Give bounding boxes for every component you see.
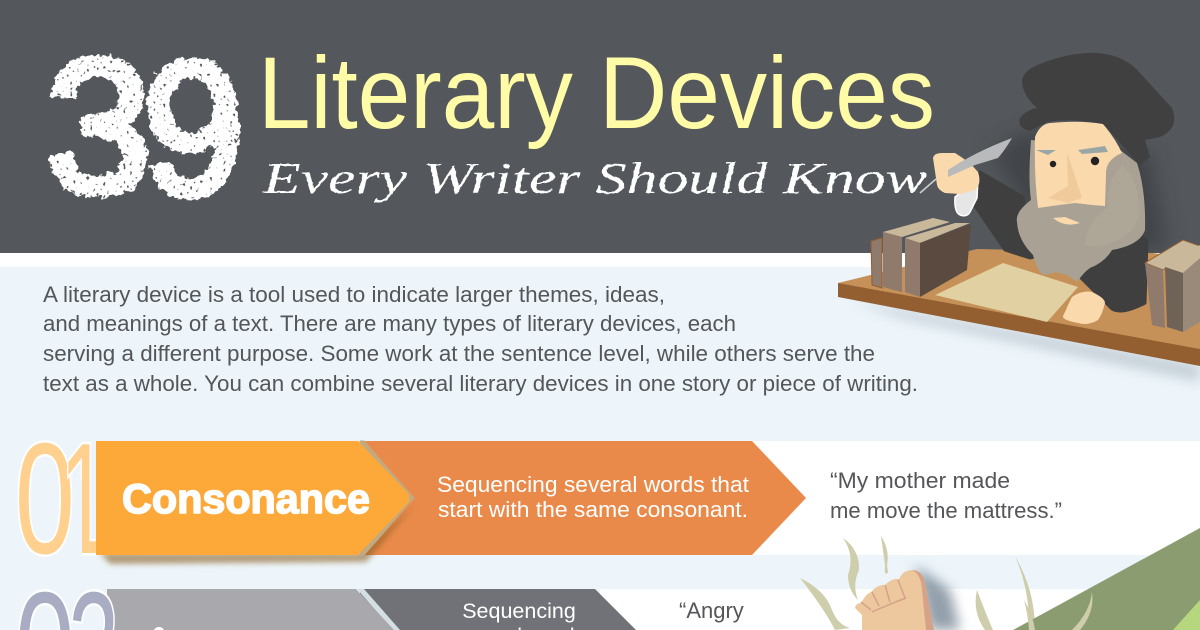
face xyxy=(1035,122,1122,208)
desk front edge xyxy=(838,283,1200,366)
heading number: 39: 9 xyxy=(143,23,243,235)
row 2 title tip xyxy=(154,627,164,630)
toe lines xyxy=(861,580,906,612)
illustration: writer at desk xyxy=(838,53,1200,382)
lighter beard tone xyxy=(1085,166,1139,246)
definition text: Sequencing several words that xyxy=(437,472,750,497)
wisp over hill xyxy=(1072,592,1092,630)
intro paragraph xyxy=(43,282,918,396)
row 1: example quote: “My mother made xyxy=(830,468,1010,493)
lower hand xyxy=(1063,292,1105,324)
row 2: definition arrow xyxy=(360,589,636,630)
row 1: example quote: me move the mattress.” xyxy=(830,498,1062,523)
arrow bevel xyxy=(357,589,400,630)
raised hand xyxy=(933,153,979,194)
brows xyxy=(1036,146,1108,155)
row 1 white band xyxy=(700,441,1200,555)
definition text xyxy=(437,472,750,522)
light green hill xyxy=(1173,600,1200,630)
robe and arm xyxy=(973,172,1147,311)
definition text xyxy=(453,599,585,630)
eyes xyxy=(1050,161,1056,167)
heading number: 39 xyxy=(46,21,243,235)
white strip under header xyxy=(0,253,1200,267)
arrow bevel xyxy=(360,441,414,555)
books left xyxy=(871,218,971,297)
nose shadow xyxy=(1048,153,1082,203)
definition text: start with the same consonant. xyxy=(438,497,748,522)
title: Literary Devices xyxy=(258,36,935,150)
arrow shadow xyxy=(100,505,414,564)
intro paragraph: and meanings of a text. There are many types of literary devices, each xyxy=(43,311,736,336)
row 2: example quote: “Angry xyxy=(679,598,744,623)
intro paragraph: text as a whole. You can combine several literary devices in one story or piece of writing. xyxy=(43,371,918,396)
row 1: number 01: 1 xyxy=(60,412,108,588)
desk top xyxy=(838,249,1200,350)
quill tip xyxy=(920,179,936,193)
definition text: Sequencing xyxy=(462,599,576,623)
foot side shade xyxy=(912,570,934,630)
foot xyxy=(855,570,926,630)
row 1 title: Consonance xyxy=(122,475,370,522)
heading number: 39: 3 xyxy=(46,21,152,233)
row 1: title arrow xyxy=(96,441,414,564)
subtitle: Every Writer Should Know xyxy=(262,154,928,203)
foot shadow xyxy=(915,565,960,630)
row 1: definition arrow xyxy=(360,441,806,555)
row 2 white band xyxy=(600,589,1200,630)
illustration: foot with smell xyxy=(800,528,1200,630)
row 1: example quote xyxy=(830,468,1062,523)
row 1: number 01 xyxy=(18,440,100,557)
header band xyxy=(0,0,1200,253)
intro paragraph: A literary device is a tool used to indicate larger themes, ideas, xyxy=(43,282,665,307)
quill xyxy=(948,138,1012,177)
row 2: title arrow xyxy=(107,589,400,630)
desk shadow xyxy=(850,300,1200,382)
hat xyxy=(1019,53,1174,165)
row 1: number 01: 0 xyxy=(15,410,75,587)
paper xyxy=(935,263,1078,322)
mouth xyxy=(1053,217,1080,225)
figure shadow xyxy=(990,130,1168,250)
sleeve cuff xyxy=(955,178,978,216)
beard xyxy=(1017,140,1145,282)
books right xyxy=(1145,240,1200,332)
green hill xyxy=(1013,528,1200,630)
intro paragraph: serving a different purpose. Some work at the sentence level, while others serve the xyxy=(43,341,875,366)
row 2: number xyxy=(15,559,119,630)
smell wisps xyxy=(800,536,1035,630)
